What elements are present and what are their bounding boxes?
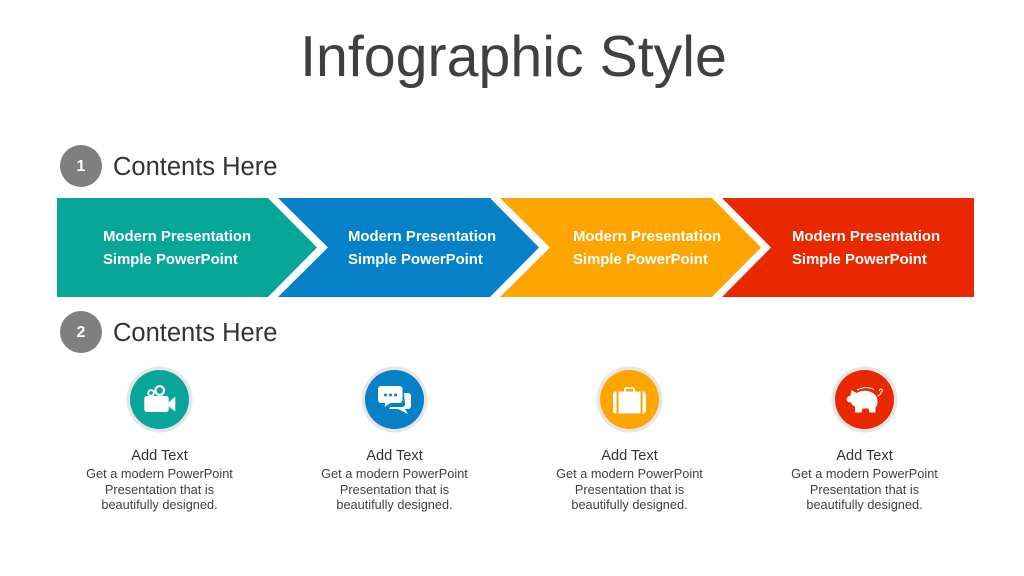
chevron 4 xyxy=(722,198,974,297)
chevron 1 label: Simple PowerPoint xyxy=(103,252,238,268)
caption 3 xyxy=(556,448,703,512)
caption 2: Add Text xyxy=(366,448,423,464)
caption 4 xyxy=(791,448,938,512)
number badge 2: 2 xyxy=(77,324,85,341)
chevron 2 label: Modern Presentation xyxy=(348,229,496,245)
chevron 2 xyxy=(278,198,539,297)
chevron 3 label: Modern Presentation xyxy=(573,229,721,245)
heading: section 1: Contents Here xyxy=(113,153,277,181)
chevron 1 label xyxy=(103,229,251,268)
caption 2: Presentation that is xyxy=(340,482,449,496)
number badge 2 xyxy=(60,311,102,353)
caption 1: beautifully designed. xyxy=(101,497,218,512)
chevron 2 label xyxy=(348,229,496,268)
caption 2: beautifully designed. xyxy=(336,497,453,512)
icon: piggy bank xyxy=(832,366,898,432)
caption 1: Get a modern PowerPoint xyxy=(86,466,233,481)
number badge 1: 1 xyxy=(77,158,85,175)
chevron 1 xyxy=(57,198,317,297)
caption 4: beautifully designed. xyxy=(806,497,923,512)
caption 4: Add Text xyxy=(836,448,893,464)
number badge 1 xyxy=(60,145,102,187)
caption 1: Add Text xyxy=(131,448,188,464)
chevron 3 xyxy=(500,198,761,297)
icon: chat bubbles xyxy=(362,366,428,432)
caption 2 xyxy=(321,448,468,512)
chevron 3 label xyxy=(573,229,721,268)
chevron 1 label: Modern Presentation xyxy=(103,229,251,245)
caption 3: Add Text xyxy=(601,448,658,464)
chevron 4 label: Simple PowerPoint xyxy=(792,252,927,268)
caption 2: Get a modern PowerPoint xyxy=(321,466,468,481)
caption 1 xyxy=(86,448,233,512)
chevron 4 label: Modern Presentation xyxy=(792,229,940,245)
title: Infographic Style xyxy=(300,25,727,89)
chevron 4 label xyxy=(792,229,940,268)
caption 3: beautifully designed. xyxy=(571,497,688,512)
chevron 2 label: Simple PowerPoint xyxy=(348,252,483,268)
chevron 3 label: Simple PowerPoint xyxy=(573,252,708,268)
icon: suitcase xyxy=(596,366,662,432)
caption 4: Presentation that is xyxy=(810,482,919,496)
heading: section 2: Contents Here xyxy=(113,319,277,347)
caption 4: Get a modern PowerPoint xyxy=(791,466,938,481)
icon: video camera xyxy=(126,366,192,432)
caption 3: Presentation that is xyxy=(575,482,684,496)
caption 1: Presentation that is xyxy=(105,482,214,496)
caption 3: Get a modern PowerPoint xyxy=(556,466,703,481)
